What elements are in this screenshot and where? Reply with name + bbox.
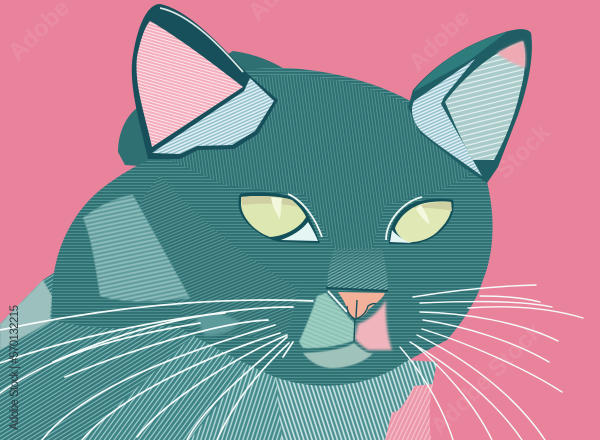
left eye: white sclera xyxy=(281,222,318,241)
right eye: white sclera xyxy=(390,230,412,243)
right eye: yellow iris xyxy=(395,201,451,242)
chin xyxy=(303,343,373,368)
shoulder: light fur patch xyxy=(83,195,190,302)
left ear: pale lower fold xyxy=(152,78,274,154)
left eye: dark outline xyxy=(238,192,320,243)
nose: pink shape xyxy=(338,292,385,319)
watermark text: Adobe Stock xyxy=(425,317,548,440)
head xyxy=(52,68,493,386)
left ear: outline xyxy=(132,4,278,159)
right eye xyxy=(386,197,454,244)
nose: dark outline xyxy=(326,288,388,291)
right ear: pale inner xyxy=(445,41,525,160)
body: pink chest patch xyxy=(385,384,433,440)
nose: nostril lines xyxy=(347,300,376,319)
left eye: white highlight xyxy=(271,197,282,219)
nose: white edge xyxy=(328,291,347,312)
left eye: white arc xyxy=(288,194,322,237)
muzzle: pink cheek xyxy=(355,300,392,350)
right ear: pink tip xyxy=(497,41,526,68)
body: pale fur band at left edge xyxy=(0,280,52,350)
whiskers: left xyxy=(0,300,313,440)
watermark text: Stock xyxy=(490,118,556,184)
right eye: white highlight xyxy=(416,205,430,225)
left ear: pink inner xyxy=(136,21,243,147)
right ear: back and outline xyxy=(408,29,532,183)
body: back lump behind head xyxy=(118,51,292,170)
left eye: yellow iris xyxy=(241,196,306,237)
left eye: upper shade xyxy=(241,196,298,207)
left ear: white rim xyxy=(160,8,243,72)
right ear xyxy=(408,29,532,183)
right ear: teal back xyxy=(413,32,507,92)
shoulder: mid fur patch xyxy=(196,314,240,336)
right eye: white arc xyxy=(386,197,422,240)
right ear: pale left fold xyxy=(412,59,482,176)
body: lower chest fur xyxy=(276,360,437,440)
head: forehead fur xyxy=(170,75,470,250)
right eye: upper shade xyxy=(412,202,452,211)
head: left cheek shadow xyxy=(130,175,300,340)
stock id text: Adobe Stock | #570132215 xyxy=(9,305,21,430)
watermark text: Adobe xyxy=(403,4,475,76)
left eye xyxy=(238,192,322,243)
whiskers: right xyxy=(400,285,583,440)
muzzle: left mint fur xyxy=(299,293,356,348)
right eye: dark outline xyxy=(389,199,454,244)
nose bridge xyxy=(327,248,388,291)
nose xyxy=(326,288,388,319)
left ear xyxy=(132,4,278,159)
mouth lines xyxy=(354,318,355,342)
body: shoulder and lower fur xyxy=(0,230,300,440)
